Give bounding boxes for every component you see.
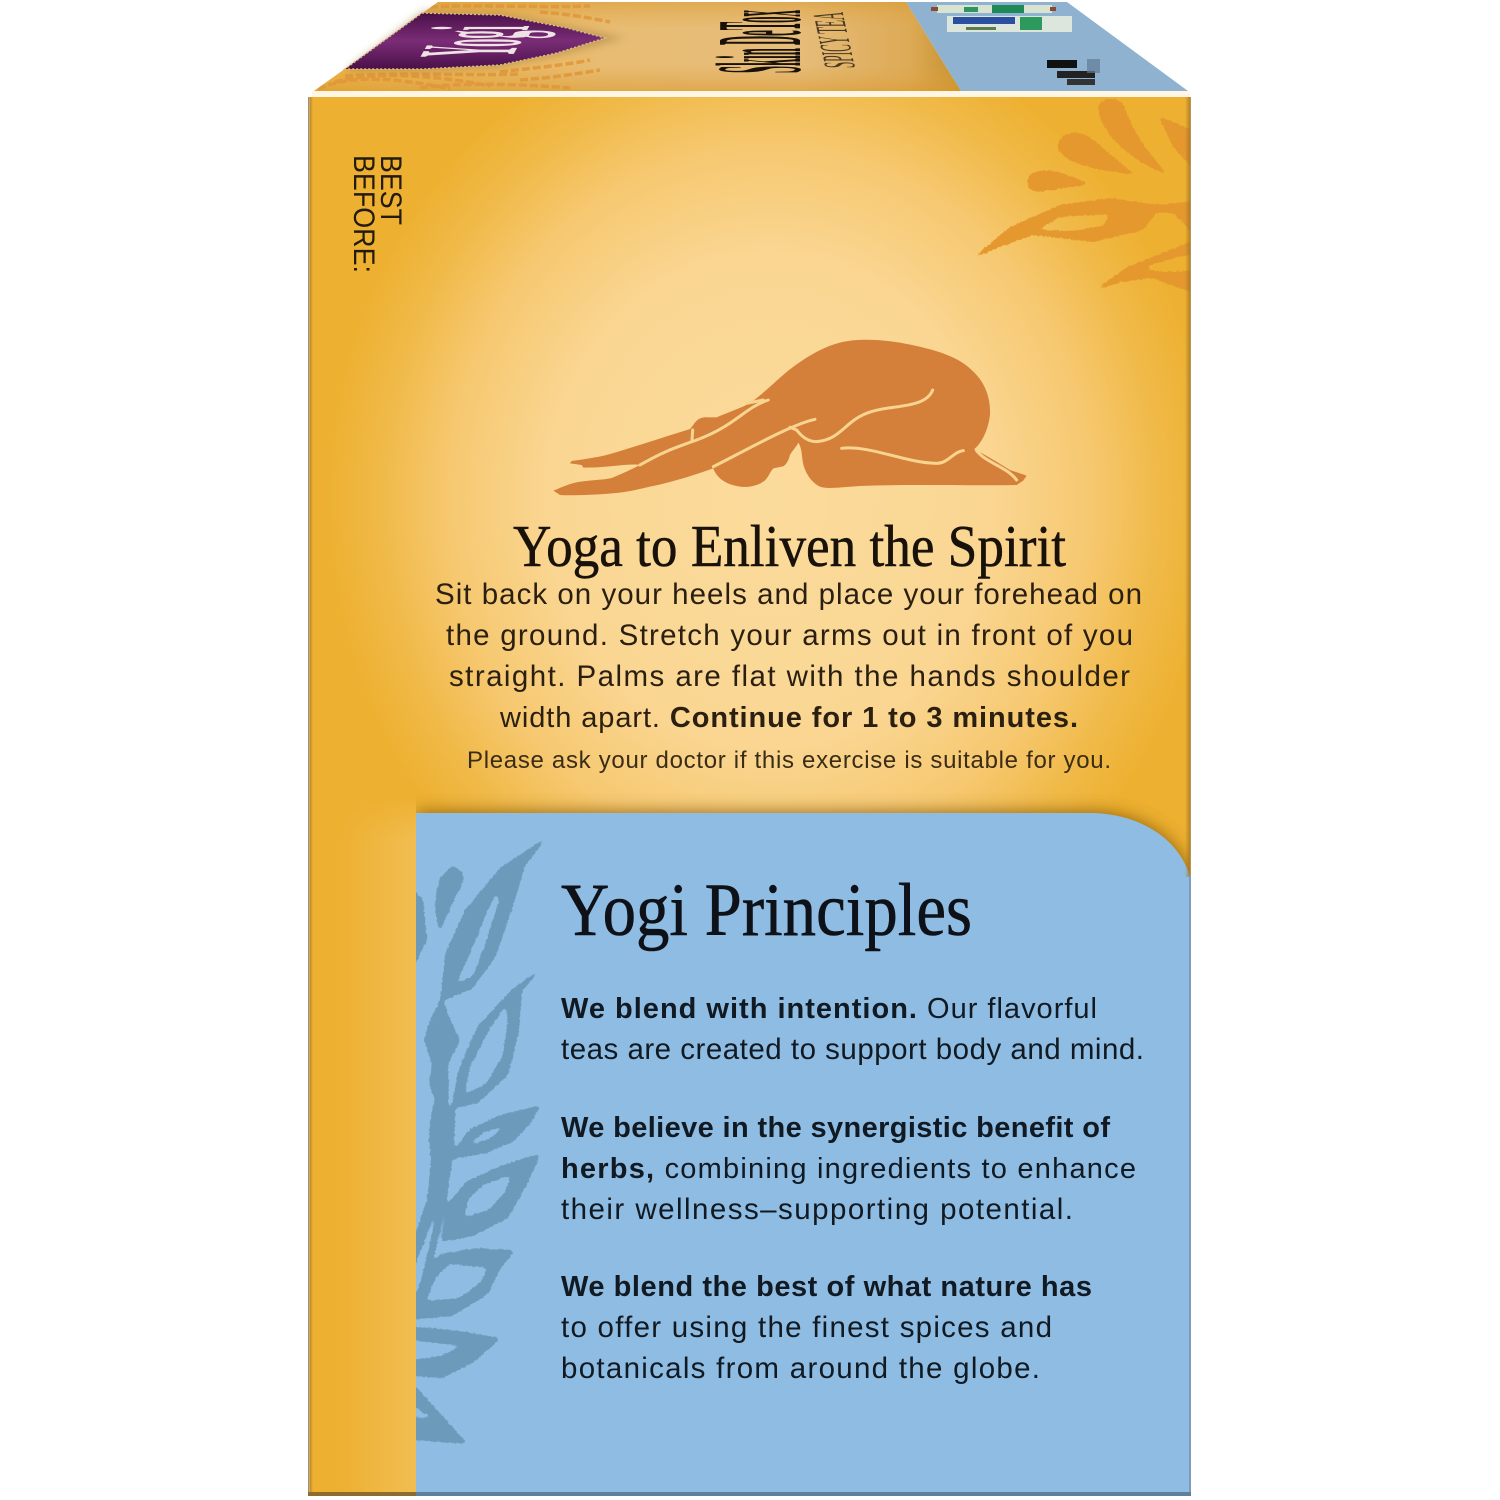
yoga pose figure (553, 340, 1027, 495)
flap gold panel (314, 2, 961, 91)
principle 1 line 2: teas are created to support body and mind. (561, 1033, 1144, 1066)
net weight text blocks (1047, 59, 1100, 85)
flap ornament (318, 6, 610, 89)
decorative gold leaves (970, 99, 1200, 296)
blue principles panel (416, 813, 1190, 1495)
principle 3 line 3: botanicals from around the globe. (561, 1352, 1040, 1385)
pose silhouette (553, 340, 1027, 495)
principle 3 line 2: to offer using the finest spices and (561, 1311, 1052, 1344)
principles heading: Yogi Principles (561, 869, 972, 952)
purple banner (345, 13, 605, 69)
principle 2 (561, 1112, 1136, 1226)
principle 3 (561, 1271, 1092, 1385)
certification logos (931, 5, 1072, 32)
best before second line: BEFORE: (347, 155, 380, 273)
front panel gold background (310, 97, 1190, 1495)
flap fold highlight (312, 91, 1190, 97)
flap blue panel (906, 2, 1188, 91)
pose contour lines (640, 390, 1017, 480)
principle 1 (561, 993, 1144, 1066)
box edge shading (308, 97, 1191, 1496)
flap tea subtitle: SPICY TEA (804, 12, 866, 68)
flap shading (314, 2, 961, 91)
botanical leaf illustration (410, 836, 548, 1444)
doctor disclaimer: Please ask your doctor if this exercise is suitable for you. (467, 747, 1111, 774)
principle 2: We believe in the synergistic benefit of (561, 1112, 1110, 1144)
yoga instructions: Sit back on your heels and place your forehead on (435, 578, 1142, 611)
top flap of box (312, 2, 1190, 97)
principle 1: We blend with intention. Our flavorful (561, 993, 1097, 1025)
yoga heading: Yoga to Enliven the Spirit (513, 513, 1067, 579)
yoga instructions (435, 578, 1142, 734)
brand name on banner: Yogi (387, 26, 560, 57)
tea box illustration (308, 2, 1191, 1496)
left strip highlight (354, 807, 416, 1492)
principle 3: We blend the best of what nature has (561, 1271, 1092, 1303)
instruction line 3: straight. Palms are flat with the hands shoulder (449, 660, 1130, 693)
shadow above blue panel (416, 800, 1190, 875)
best before label (347, 155, 407, 273)
instruction line 4: width apart. Continue for 1 to 3 minutes. (499, 702, 1078, 734)
instruction line 2: the ground. Stretch your arms out in front of you (446, 619, 1133, 652)
principle 2 line 2: herbs, combining ingredients to enhance (561, 1153, 1136, 1185)
banner shadow (345, 11, 625, 71)
principle 2 line 3: their wellness–supporting potential. (561, 1193, 1073, 1226)
best before label: BEST (374, 155, 407, 225)
